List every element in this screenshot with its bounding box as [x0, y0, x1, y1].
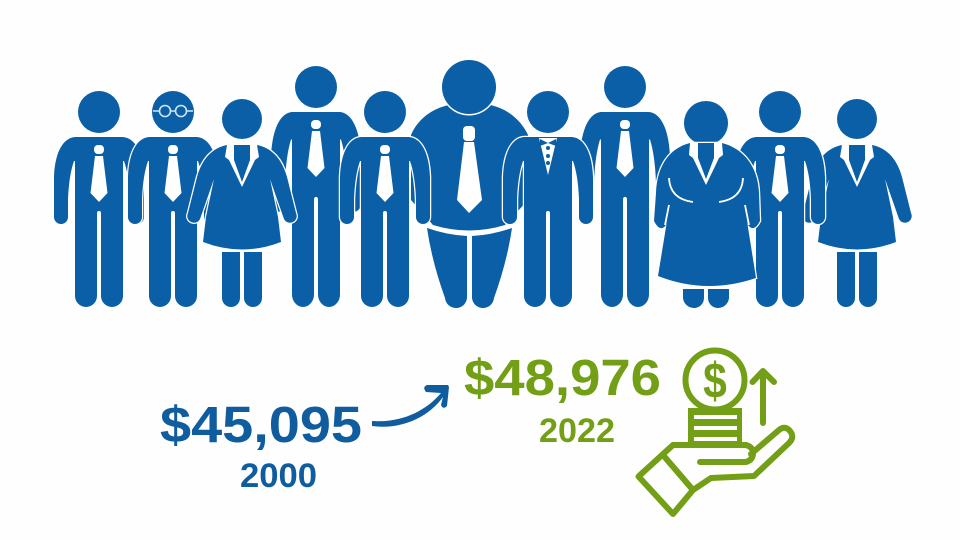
person: man with glasses [128, 91, 218, 307]
up arrow [752, 371, 774, 423]
person: tall man 8 [580, 66, 670, 307]
coin [686, 350, 744, 410]
person: man with bow tie [503, 91, 593, 307]
year 2000: 2000 [240, 457, 317, 495]
person: tall man 4 [271, 66, 361, 307]
hand [673, 428, 792, 490]
person: large woman [654, 101, 760, 308]
dollar sign: $ [703, 353, 727, 409]
person: woman 3 [187, 99, 297, 307]
value 2022: $48,976 [464, 349, 661, 406]
icon: glasses [153, 106, 193, 116]
icon: hand holding coins with up arrow [638, 350, 792, 514]
arrow: rising [372, 385, 449, 427]
person: woman 11 [802, 99, 912, 307]
person: man 1 [54, 91, 144, 307]
value 2000: $45,095 [160, 396, 362, 453]
cuff [638, 445, 693, 514]
person: man 5 [340, 91, 430, 307]
person: man 10 [735, 91, 825, 307]
people row [54, 60, 912, 308]
person: large man [411, 60, 528, 308]
year 2022: 2022 [539, 412, 615, 450]
coin stack [688, 408, 742, 446]
